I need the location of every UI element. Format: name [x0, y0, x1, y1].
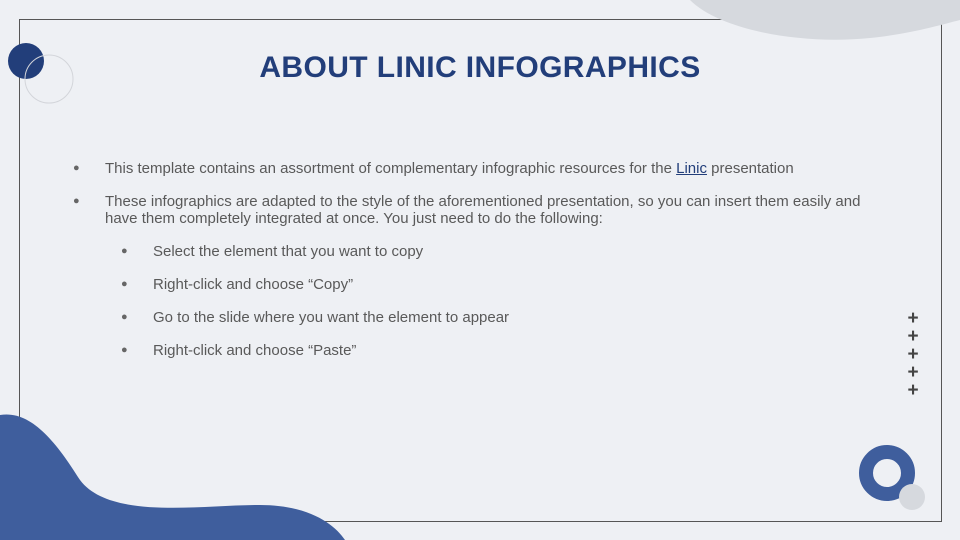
- text block: sub bullets: Right-click and choose “Copy”: [153, 276, 353, 293]
- icon: outline circle: [25, 55, 73, 103]
- text block: main bullets: These infographics are adapted to the style of the aforementioned presentation, so you can insert them easily and have them completely integrated at once. You just need to do the following:: [105, 193, 860, 227]
- icon: plus signs: +: [907, 362, 919, 383]
- text block: main bullets: This template contains an assortment of complementary infographic resources for the Linic presentation: [105, 160, 794, 177]
- icon: grey dot: [899, 484, 925, 510]
- icon: plus signs: +: [907, 326, 919, 347]
- icon: blue ring: [866, 452, 908, 494]
- shape: top-right grey blob: [690, 0, 960, 40]
- text block: sub bullets: Select the element that you want to copy: [153, 243, 423, 260]
- icon: dark circle: [8, 43, 44, 79]
- text block: sub bullets: Right-click and choose “Paste”: [153, 342, 356, 359]
- text block: main bullets: [74, 160, 860, 359]
- icon: plus signs: +: [907, 344, 919, 365]
- title: ABOUT LINIC INFOGRAPHICS: [259, 51, 701, 84]
- text block: sub bullets: [122, 243, 509, 359]
- text block: sub bullets: Go to the slide where you want the element to appear: [153, 309, 509, 326]
- icon: plus signs: +: [907, 308, 919, 329]
- icon: plus signs: [907, 308, 919, 401]
- shape: bottom-left blue blob: [0, 414, 345, 540]
- icon: plus signs: +: [907, 380, 919, 401]
